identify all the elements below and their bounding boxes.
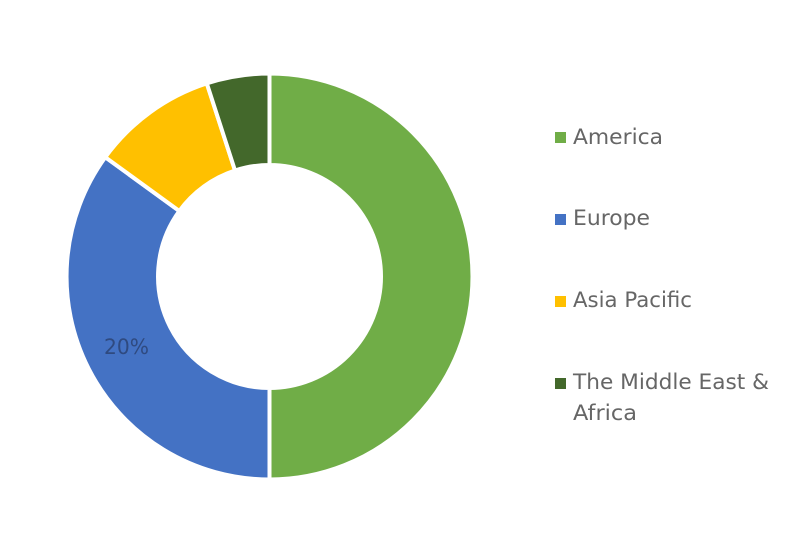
segment: America — [270, 74, 472, 480]
legend item: Europe: Europe — [573, 206, 650, 230]
legend — [555, 125, 769, 425]
segment: Asia Pacific — [105, 83, 235, 211]
legend item: The Middle East & Africa — [555, 370, 769, 425]
legend item: America: America — [573, 125, 663, 149]
legend item: The Middle East & Africa: The Middle East & — [572, 370, 769, 394]
segment: Europe — [67, 157, 270, 479]
legend item: Asia Pacific: Asia Pacific — [573, 288, 692, 312]
donut chart — [67, 73, 472, 479]
segment: The Middle East & Africa — [207, 73, 270, 170]
data label: Europe 20%: 20% — [104, 335, 149, 359]
legend item: The Middle East & Africa: Africa — [573, 401, 637, 425]
